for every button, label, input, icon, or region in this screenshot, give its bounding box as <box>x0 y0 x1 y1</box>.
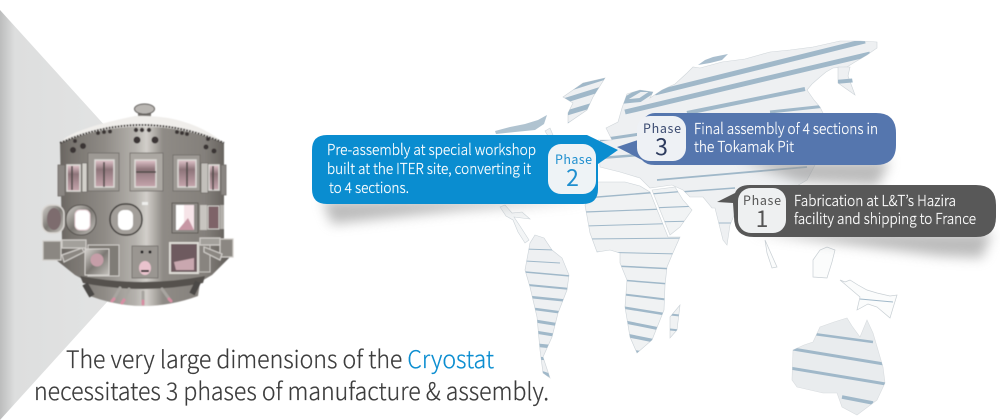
phase 3 badge <box>637 116 686 162</box>
island: Greenland <box>562 78 606 124</box>
bottom nozzles <box>112 288 171 304</box>
callout: phase 3 <box>617 113 896 165</box>
callout: phase 2 <box>312 135 618 204</box>
side flanges and struts <box>43 238 233 262</box>
islands: Indonesia and New Guinea <box>765 240 897 318</box>
phase 2 badge <box>548 144 596 194</box>
heading text: The very large dimensions of the Cryostat <box>66 340 495 375</box>
heading text <box>34 340 549 407</box>
top rim <box>60 116 224 143</box>
phase 2 description: to 4 sections. <box>329 177 409 198</box>
upper row windows <box>67 160 219 191</box>
upper window mullions <box>72 162 213 190</box>
phase 3 badge: Phase <box>643 118 681 137</box>
phase 3 description <box>694 118 878 157</box>
phase 3 description: the Tokamak Pit <box>694 136 795 157</box>
phase 2 description: built at the ITER site, converting it <box>327 158 532 179</box>
island: Novaya Zemlya <box>698 54 728 65</box>
phase 2 badge: Phase <box>555 149 592 168</box>
phase 1 description: Fabrication at L&T’s Hazira <box>794 190 956 211</box>
phase 2 description: Pre-assembly at special workshop <box>327 139 536 160</box>
continent: Eurasia <box>597 41 877 245</box>
peninsula: Arabia <box>652 186 692 236</box>
upper row panels <box>58 153 226 196</box>
phase 1 badge <box>738 188 786 234</box>
callout shadows <box>322 160 992 258</box>
continent: South and Central America <box>500 205 570 378</box>
phase 1 description: facility and shipping to France <box>794 208 976 229</box>
middle row windows <box>172 203 224 233</box>
heading text: necessitates 3 phases of manufacture & assembly. <box>34 372 549 407</box>
lower ring <box>80 276 205 289</box>
callout: phase 1 <box>717 185 996 237</box>
cryostat illustration <box>42 104 233 306</box>
small highlight <box>142 202 148 205</box>
world map <box>495 41 897 415</box>
phase 1 badge: 1 <box>756 200 768 234</box>
phase 1 badge: Phase <box>743 190 781 209</box>
background grey triangle <box>0 10 186 420</box>
phase 3 badge: 3 <box>655 128 668 162</box>
island: Japan <box>838 66 856 96</box>
lower row boxes <box>85 243 210 278</box>
top knob <box>134 104 154 117</box>
continent: North America fragment <box>495 115 553 136</box>
phase 1 description <box>794 190 976 229</box>
top row bolts <box>70 128 216 154</box>
phase 2 badge: 2 <box>566 159 579 193</box>
vessel body <box>50 120 232 306</box>
middle row ports <box>42 204 142 235</box>
continent: Africa <box>585 182 690 355</box>
island: Madagascar <box>670 304 680 338</box>
bottom brackets <box>85 282 198 296</box>
continent: Australia <box>790 318 886 415</box>
phase 2 description <box>327 139 536 198</box>
phase 3 description: Final assembly of 4 sections in <box>694 118 878 139</box>
